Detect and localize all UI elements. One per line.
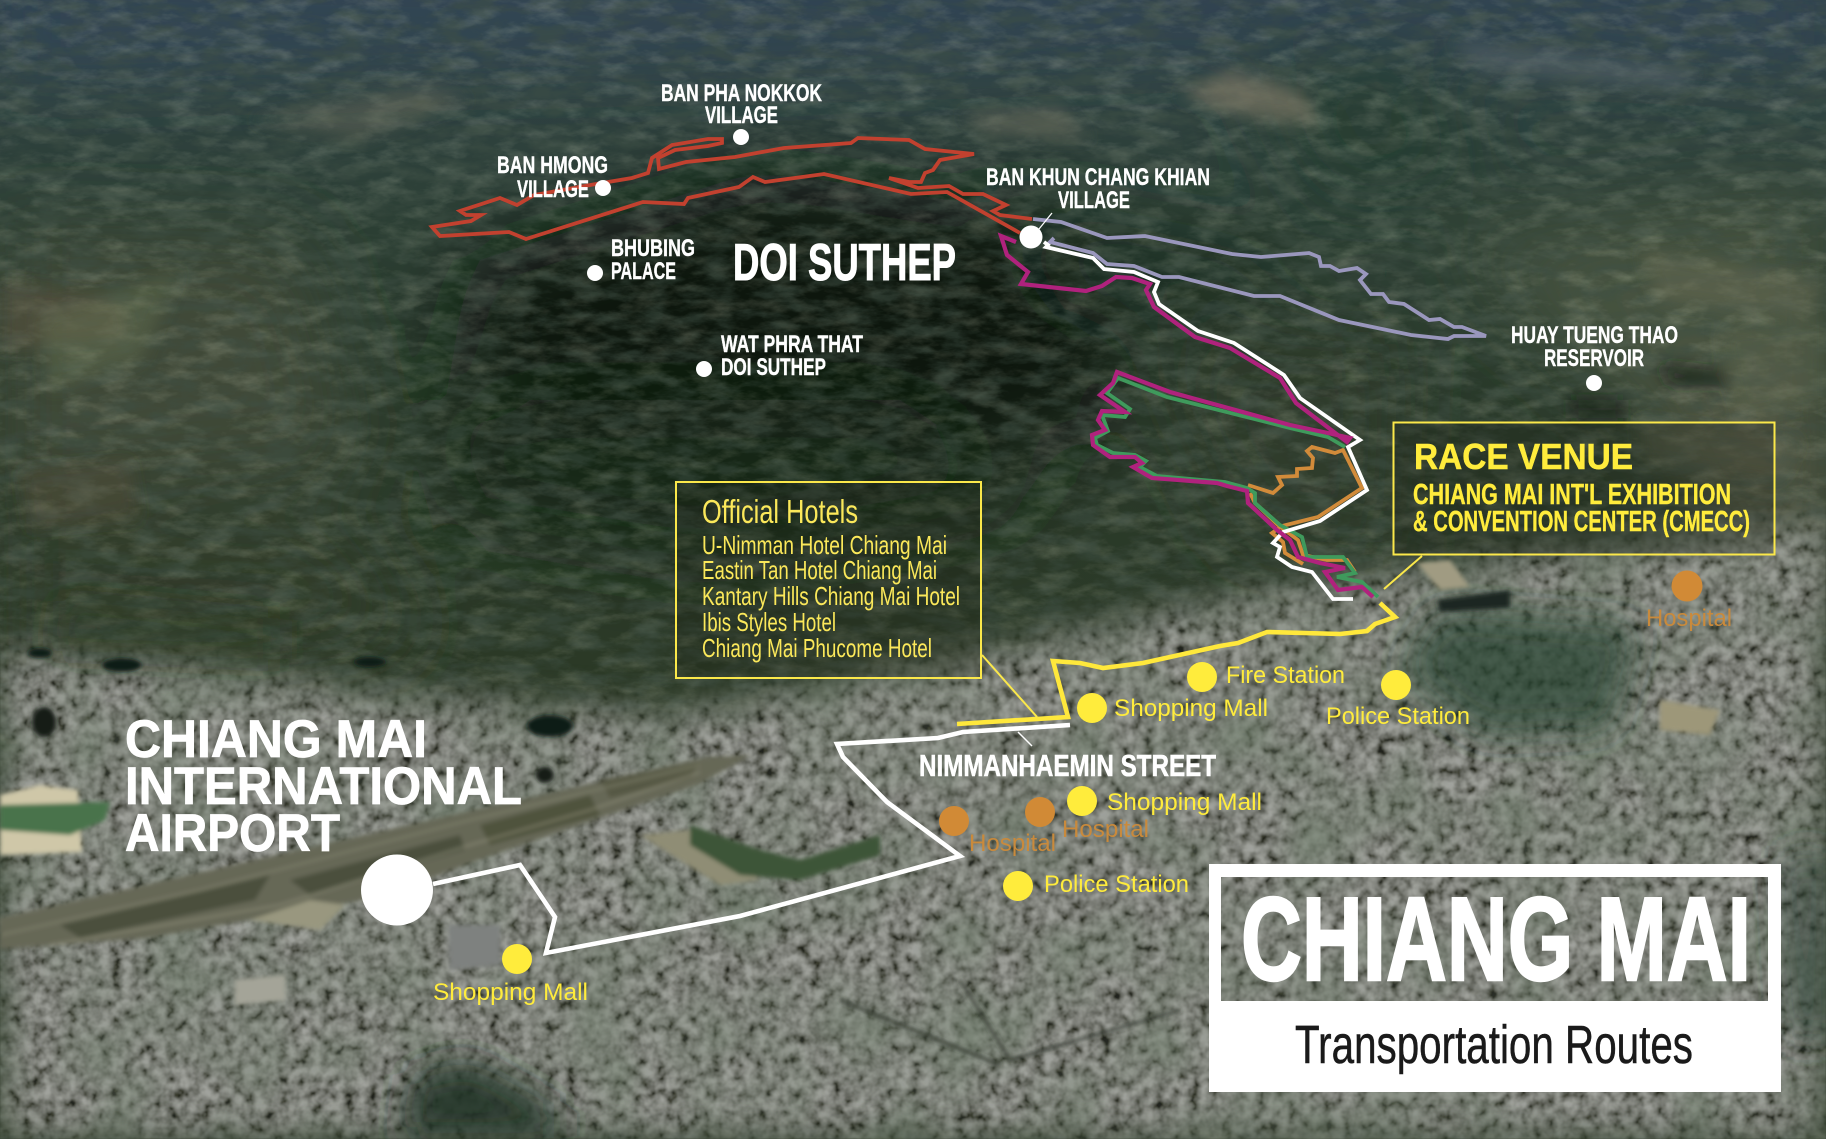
label: Bhubing Palace (587, 235, 695, 285)
poi: fire station (1187, 662, 1345, 692)
label: Wat Phra That Doi Suthep: WAT PHRA THAT (721, 331, 863, 358)
callout: official hotels: Official Hotels (702, 493, 858, 530)
callout: race venue (1384, 422, 1774, 589)
callout: race venue: RACE VENUE (1414, 436, 1633, 477)
poi: hospital Nimman west (939, 806, 1056, 857)
route: magenta loop (1001, 236, 1373, 597)
poi: hospital Nimman west: Hospital (969, 830, 1056, 857)
callout: official hotels (676, 482, 1037, 717)
route: orange loop near the venue (1248, 447, 1362, 572)
route: white route from village to venue (1044, 242, 1367, 599)
callout: official hotels: Ibis Styles Hotel (702, 607, 836, 637)
label: Ban Pha Nokkok Village: BAN PHA NOKKOK (661, 80, 822, 107)
label: Bhubing Palace: BHUBING (611, 235, 695, 262)
label: Nimmanhaemin Street: NIMMANHAEMIN STREET (919, 748, 1216, 783)
poi: shopping mall airport: Shopping Mall (433, 979, 588, 1006)
label: Ban Khun Chang Khian Village: VILLAGE (1058, 187, 1130, 214)
marker: airport (361, 854, 433, 926)
label: Huay Tueng Thao Reservoir: HUAY TUENG THAO (1511, 322, 1678, 349)
label: Nimmanhaemin Street (919, 732, 1216, 783)
poi: police station east: Police Station (1326, 703, 1470, 730)
route: yellow route from Nimmanhaemin to race venue (957, 603, 1395, 724)
label: Chiang Mai International Airport: AIRPORT (125, 804, 340, 863)
poi: hospital Nimman east (1025, 797, 1149, 843)
label: Ban Hmong Village: VILLAGE (517, 176, 589, 203)
subtitle: Transportation Routes: Transportation Routes (1295, 1015, 1693, 1075)
label: Ban Khun Chang Khian Village: BAN KHUN CHANG KHIAN (986, 164, 1210, 191)
airport runway complex (0, 560, 1720, 1065)
poi: shopping mall north: Shopping Mall (1114, 695, 1268, 722)
label: Ban Khun Chang Khian Village (986, 164, 1210, 248)
label: Wat Phra That Doi Suthep (696, 331, 863, 381)
label: Chiang Mai International Airport: CHIANG MAI (125, 710, 427, 769)
label: Ban Hmong Village: BAN HMONG (497, 152, 608, 179)
poi: hospital east: Hospital (1646, 605, 1732, 632)
poi: hospital east (1646, 570, 1732, 632)
poi: shopping mall airport (433, 944, 588, 1006)
title panel (1209, 864, 1781, 1092)
label: Ban Pha Nokkok Village: VILLAGE (705, 102, 778, 129)
poi: fire station: Fire Station (1226, 662, 1345, 689)
label: Chiang Mai International Airport (125, 710, 522, 863)
label: Bhubing Palace: PALACE (611, 258, 676, 285)
poi: hospital Nimman east: Hospital (1062, 816, 1149, 843)
city ground (0, 504, 1826, 1139)
poi: police station east (1326, 670, 1470, 730)
heading: Doi Suthep: DOI SUTHEP (733, 234, 956, 292)
label: Ban Hmong Village (497, 152, 611, 203)
callout: official hotels: Eastin Tan Hotel Chiang Mai (702, 555, 937, 585)
callout: official hotels: Chiang Mai Phucome Hotel (702, 633, 932, 663)
label: Huay Tueng Thao Reservoir: RESERVOIR (1544, 345, 1644, 372)
poi: shopping mall Nimman: Shopping Mall (1107, 789, 1262, 816)
poi: police station south: Police Station (1044, 871, 1189, 898)
route: green loop (1095, 378, 1378, 597)
route: white route from airport to Nimmanhaemin (433, 725, 1070, 953)
label: Chiang Mai International Airport: INTERNATIONAL (125, 757, 522, 816)
label: Huay Tueng Thao Reservoir (1511, 322, 1678, 391)
label: Wat Phra That Doi Suthep: DOI SUTHEP (721, 354, 826, 381)
route: red loop around Doi Suthep ridge (432, 138, 1032, 239)
poi: police station south (1003, 871, 1189, 901)
callout: official hotels: Kantary Hills Chiang Mai Hotel (702, 581, 960, 611)
callout: official hotels: U-Nimman Hotel Chiang Mai (702, 530, 947, 560)
route: lavender loop to Huay Tueng Thao reservoir (1033, 219, 1486, 339)
label: Ban Pha Nokkok Village (661, 80, 822, 145)
